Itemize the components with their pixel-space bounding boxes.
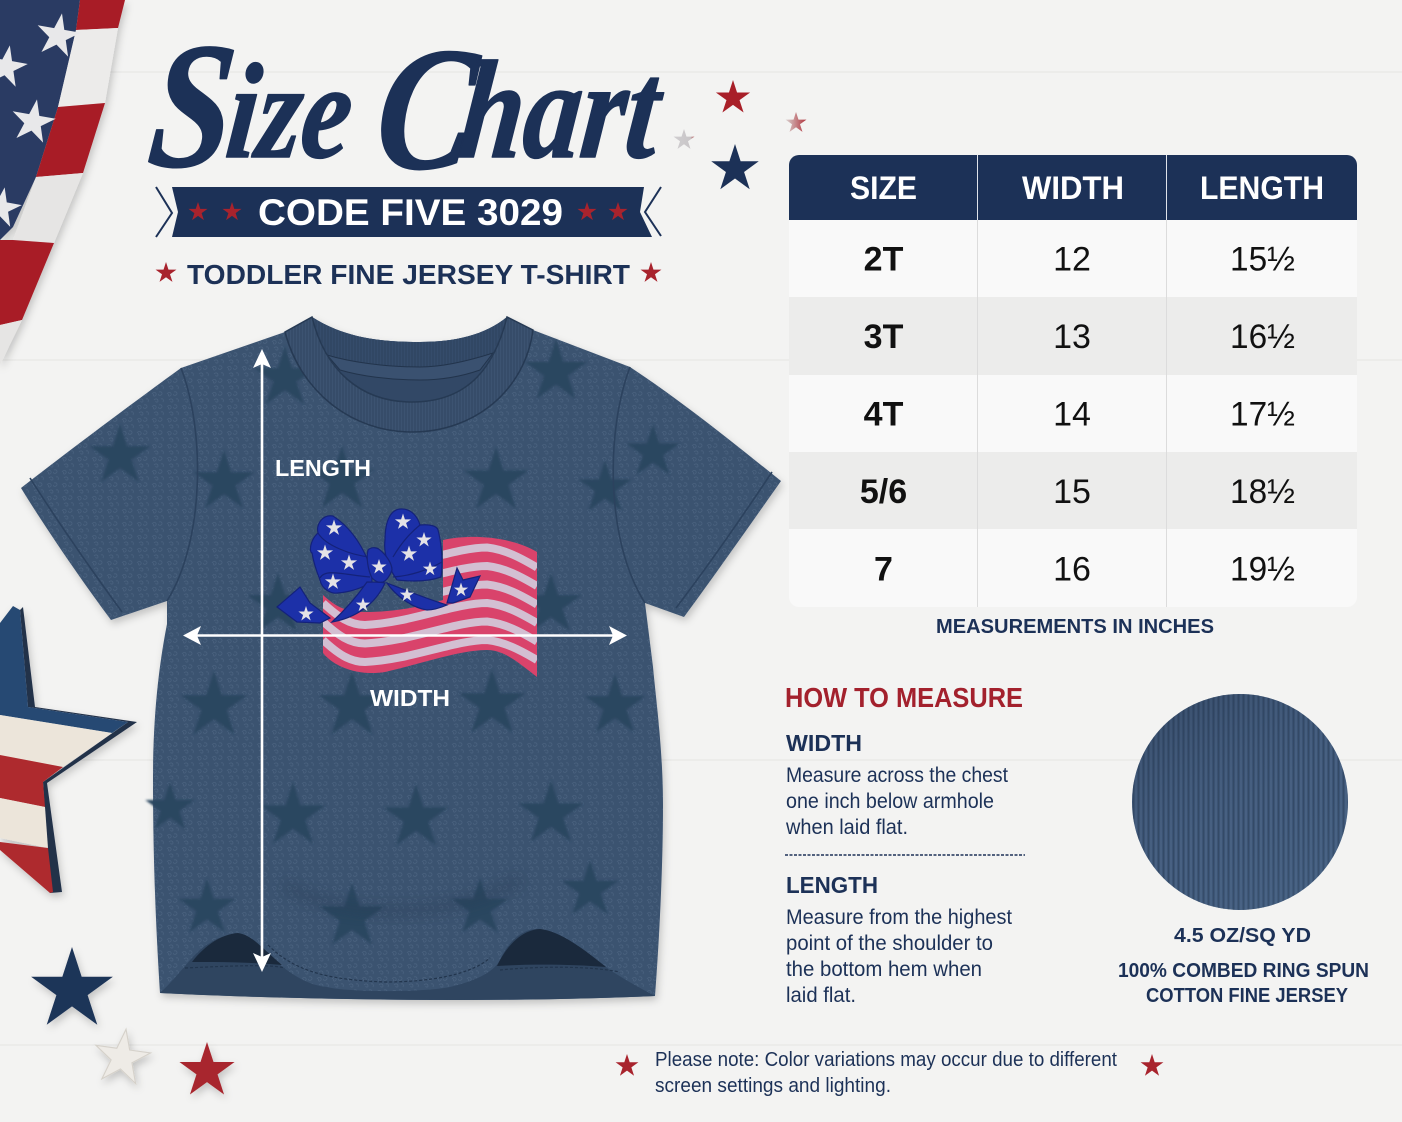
table body xyxy=(789,155,1357,607)
small wooden stars, bottom left xyxy=(31,947,235,1094)
width instructions xyxy=(785,730,1008,839)
hem stitching xyxy=(185,945,620,982)
table header: SIZE xyxy=(850,170,917,206)
width instructions: when laid flat. xyxy=(785,816,908,839)
row 3T: 3T xyxy=(864,318,904,356)
width instructions: Measure across the chest xyxy=(786,764,1008,787)
row 3T: 13 xyxy=(1053,318,1091,356)
measurement arrow: length xyxy=(253,349,271,972)
label: width: WIDTH xyxy=(370,685,450,711)
heading: HOW TO MEASURE xyxy=(785,682,1023,713)
title: ize xyxy=(220,36,388,186)
row 4T xyxy=(864,396,1295,434)
American flag drape, top left xyxy=(0,0,125,365)
wooden star, left xyxy=(0,606,137,893)
embroidered flag xyxy=(320,530,540,680)
subtitle: TODDLER FINE JERSEY T-SHIRT xyxy=(187,259,630,290)
row 4T: 14 xyxy=(1053,396,1091,434)
width instructions: WIDTH xyxy=(786,730,862,756)
fabric description xyxy=(1118,960,1369,1007)
row 5/6: 15 xyxy=(1053,473,1091,511)
row 5/6 xyxy=(860,473,1295,511)
front collar rib xyxy=(285,317,533,432)
table header xyxy=(789,155,1357,220)
ribbon banner: code five 3029 xyxy=(156,187,661,237)
label: length: LENGTH xyxy=(275,455,371,481)
hem shadow left xyxy=(192,933,282,965)
row 5/6: 5/6 xyxy=(860,473,907,511)
size table xyxy=(789,155,1357,607)
ribbon banner: code five 3029: CODE FIVE 3029 xyxy=(258,192,563,233)
length instructions: point of the shoulder to xyxy=(786,932,993,955)
title: C xyxy=(368,11,487,206)
table footnote: MEASUREMENTS IN INCHES xyxy=(936,616,1214,638)
length instructions: laid flat. xyxy=(786,984,856,1007)
decorative stars, top xyxy=(674,80,806,189)
grid lines xyxy=(978,220,1166,607)
fabric description: 100% COMBED RING SPUN xyxy=(1118,960,1369,982)
width instructions: one inch below armhole xyxy=(786,790,994,813)
row 2T xyxy=(864,240,1295,278)
fabric fold shading xyxy=(285,880,520,911)
measurement arrow: width xyxy=(183,626,627,645)
row 7 xyxy=(874,550,1295,588)
table header: WIDTH xyxy=(1022,170,1124,206)
inner neck and back collar xyxy=(312,317,507,402)
hem shadow right xyxy=(497,929,606,967)
row 3T: 16½ xyxy=(1230,318,1295,356)
length instructions: Measure from the highest xyxy=(786,906,1012,929)
row 4T: 4T xyxy=(864,396,904,434)
row 7: 7 xyxy=(874,550,893,588)
title: S xyxy=(141,6,244,205)
embroidered bow xyxy=(277,509,480,623)
fabric description: COTTON FINE JERSEY xyxy=(1146,985,1349,1007)
row 3T xyxy=(864,318,1295,356)
row 2T: 2T xyxy=(864,240,904,278)
row 2T: 15½ xyxy=(1230,240,1295,278)
t-shirt xyxy=(21,317,781,1000)
fabric weight: 4.5 OZ/SQ YD xyxy=(1174,925,1311,947)
title: hart xyxy=(453,33,670,188)
color note: Please note: Color variations may occur due to different xyxy=(655,1049,1117,1071)
row 2T: 12 xyxy=(1053,240,1091,278)
back panel visible under curved hem xyxy=(160,929,655,1000)
how to measure xyxy=(785,682,1025,1007)
shirt texture xyxy=(21,317,781,1000)
length instructions: LENGTH xyxy=(786,872,878,898)
row 4T: 17½ xyxy=(1230,396,1295,434)
length instructions: the bottom hem when xyxy=(786,958,982,981)
color note: screen settings and lighting. xyxy=(655,1075,891,1097)
row 5/6: 18½ xyxy=(1230,473,1295,511)
row 7: 16 xyxy=(1053,550,1091,588)
shirt body xyxy=(21,317,781,1000)
alternate rows xyxy=(789,297,1357,529)
length instructions xyxy=(786,872,1012,1007)
table header: LENGTH xyxy=(1200,170,1324,206)
row 7: 19½ xyxy=(1230,550,1295,588)
color note xyxy=(616,1049,1163,1097)
fabric swatch xyxy=(1130,692,1350,912)
star print xyxy=(90,339,680,945)
sleeve seams xyxy=(30,367,772,612)
